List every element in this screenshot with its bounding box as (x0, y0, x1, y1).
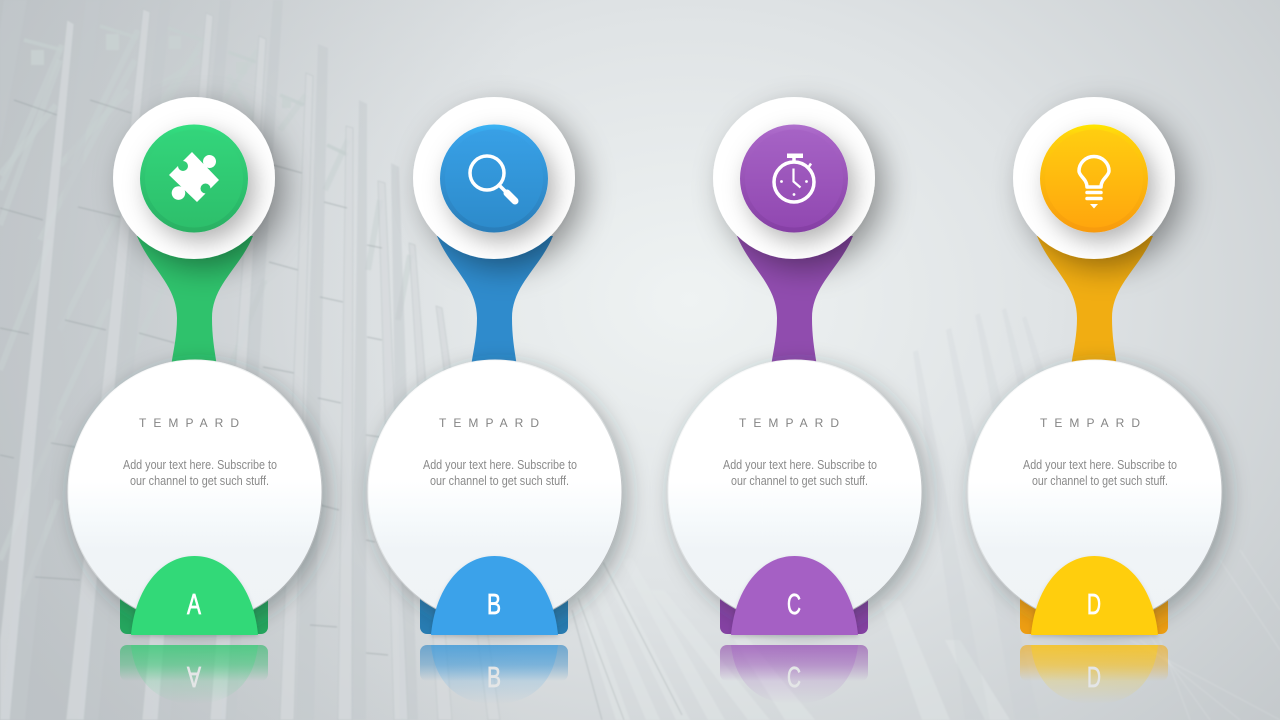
connector neck A (137, 236, 253, 366)
base tab D (1020, 585, 1168, 634)
body text D: Add your text here. Subscribe to (1023, 458, 1177, 472)
icon: stopwatch (774, 154, 814, 202)
reflection D (1020, 645, 1168, 704)
icon button C (740, 124, 848, 232)
body text A: Add your text here. Subscribe to (123, 458, 277, 472)
icon ring A (113, 97, 275, 259)
icon ring D (1013, 97, 1175, 259)
reflection A (120, 645, 268, 704)
text card D (968, 360, 1222, 624)
body text C (723, 458, 877, 488)
reflection B (420, 645, 568, 704)
icon: magnifier (470, 156, 515, 201)
letter dome B: B (487, 589, 501, 621)
text card C (668, 360, 922, 624)
heading D: TEMPARD (1040, 416, 1140, 430)
body text D (1023, 458, 1177, 488)
reflection C (720, 645, 868, 704)
base tab A (120, 585, 268, 634)
icon: puzzle piece (169, 152, 219, 202)
body text C: Add your text here. Subscribe to (723, 458, 877, 472)
icon button D (1040, 124, 1148, 232)
background: fan of beams bottom centre and right (572, 308, 1280, 720)
body text C: our channel to get such stuff. (731, 474, 868, 488)
reflection B: B (487, 662, 501, 694)
letter dome C (731, 556, 858, 635)
reflection A: A (187, 660, 201, 692)
column B: blue (368, 97, 622, 704)
icon button A (140, 124, 248, 232)
text card B (368, 360, 622, 624)
letter dome C: C (787, 589, 801, 621)
letter dome D: D (1087, 589, 1101, 621)
letter dome A: A (187, 589, 201, 621)
base tab C (720, 585, 868, 634)
letter dome B (431, 556, 558, 635)
body text A: our channel to get such stuff. (130, 474, 269, 488)
column D: yellow (968, 97, 1222, 704)
icon ring B (413, 97, 575, 259)
heading C: TEMPARD (739, 416, 839, 430)
icon ring C (713, 97, 875, 259)
text card A (68, 360, 322, 624)
connector neck C (737, 236, 853, 366)
body text B (423, 458, 577, 488)
reflection C: C (787, 662, 801, 694)
letter dome A (131, 556, 258, 635)
reflection D: D (1087, 662, 1101, 694)
connector neck B (437, 236, 553, 366)
icon button B (440, 124, 548, 232)
background: building structure (0, 0, 500, 720)
base tab B (420, 585, 568, 634)
letter dome D (1031, 556, 1158, 635)
heading A: TEMPARD (139, 416, 239, 430)
body text B: our channel to get such stuff. (430, 474, 569, 488)
column C: purple (668, 97, 922, 704)
icon: light bulb (1079, 156, 1109, 208)
body text B: Add your text here. Subscribe to (423, 458, 577, 472)
column A: green (68, 97, 322, 704)
body text D: our channel to get such stuff. (1032, 474, 1168, 488)
heading B: TEMPARD (439, 416, 539, 430)
connector neck D (1037, 236, 1153, 366)
body text A (123, 458, 277, 488)
